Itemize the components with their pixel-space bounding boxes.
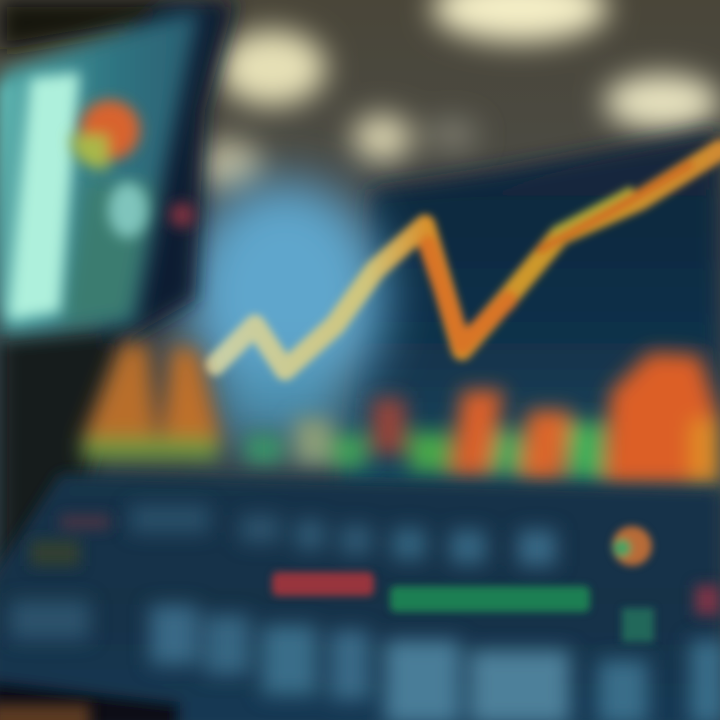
red and orange bars xyxy=(372,398,406,454)
small pie marker xyxy=(612,526,652,566)
dark chart screen xyxy=(340,130,720,490)
ceiling lights xyxy=(194,0,720,191)
brown foreground corner xyxy=(0,704,90,720)
green ticker strip xyxy=(390,586,654,642)
red ticker strip xyxy=(272,572,374,596)
orange bars left xyxy=(82,342,158,445)
dark figure and left wall xyxy=(0,0,235,580)
green bars xyxy=(82,438,218,460)
mint light stripe xyxy=(0,72,80,320)
colourful pie icon on panel xyxy=(70,100,195,238)
bar chart xyxy=(82,342,720,484)
teal wall panel xyxy=(0,10,200,335)
line chart xyxy=(215,150,720,370)
data table cells xyxy=(10,505,720,720)
small red markers xyxy=(30,515,720,615)
lower data panel xyxy=(0,474,720,720)
blue globe xyxy=(185,180,385,440)
